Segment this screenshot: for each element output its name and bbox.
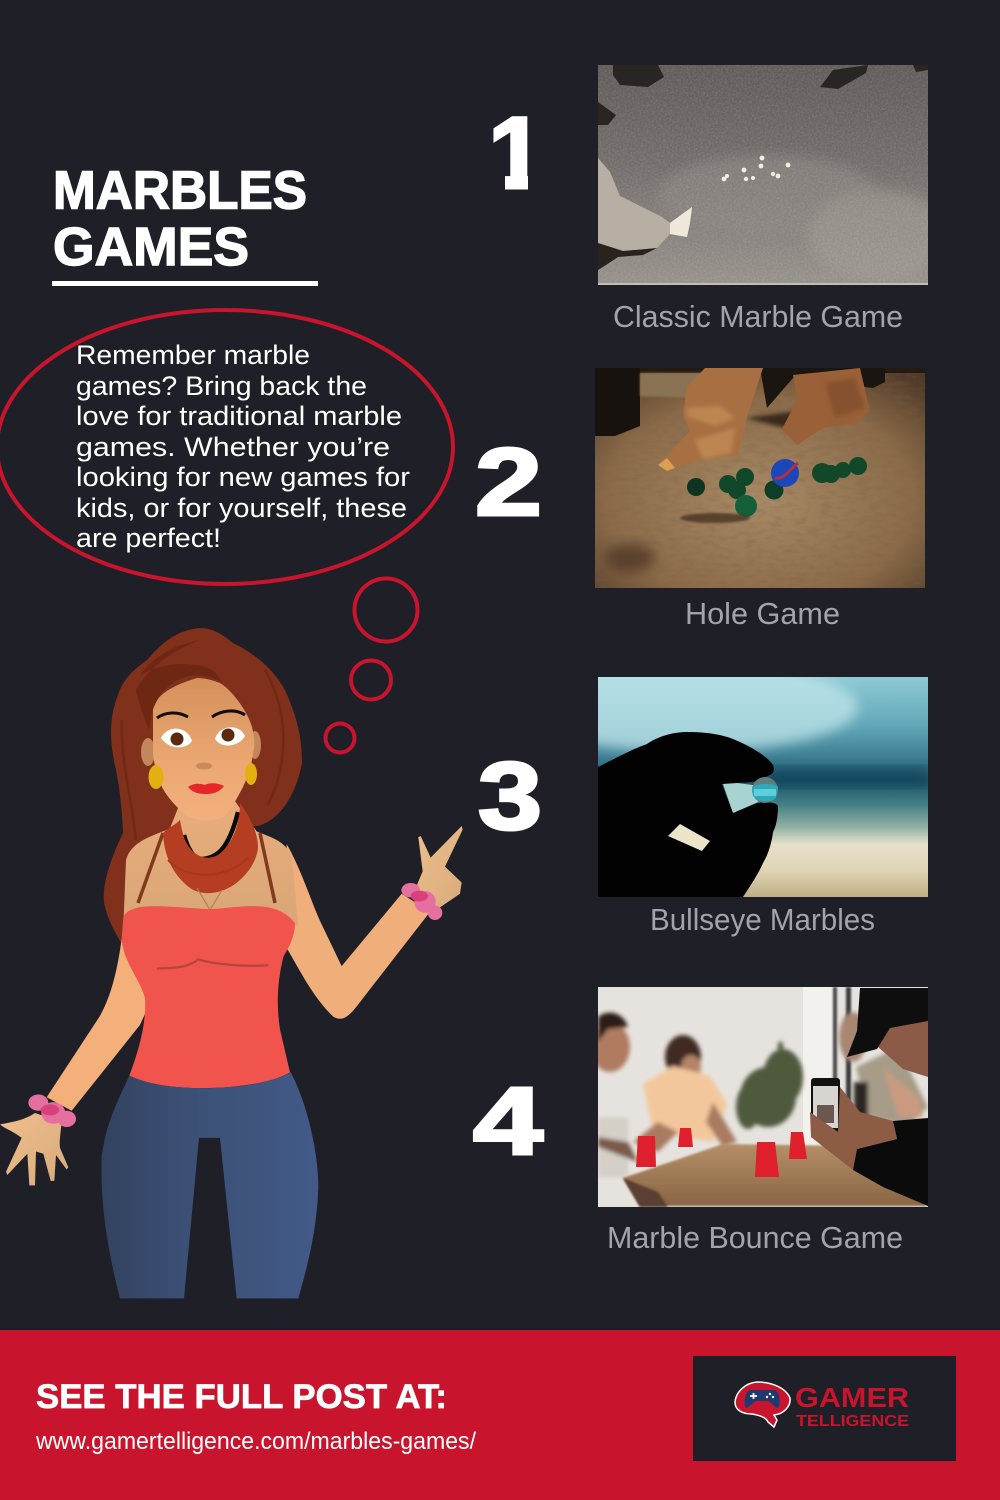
- marble: [752, 777, 778, 803]
- blue marble: [771, 459, 799, 487]
- step 1: [488, 65, 948, 334]
- photo: bullseye marbles: [598, 677, 928, 897]
- step 2: [475, 368, 925, 631]
- title: MARBLES: [53, 160, 307, 220]
- hands and sleeve: [810, 1087, 897, 1170]
- intro paragraph: games? Bring back the: [76, 371, 367, 401]
- illustration: woman pointing: [0, 628, 463, 1298]
- number 2: 2: [475, 429, 542, 536]
- table: [623, 1144, 928, 1206]
- logo box: TELLIGENCE: [796, 1413, 909, 1430]
- footer band: [0, 1330, 1000, 1500]
- necklace: [197, 888, 222, 925]
- jeans: [101, 1072, 318, 1298]
- step 4: [473, 987, 928, 1255]
- lips: [188, 783, 224, 794]
- thought circles: [326, 578, 418, 752]
- straps: [138, 833, 275, 903]
- caption: Classic Marble Game: [613, 299, 903, 334]
- step 3: [478, 662, 928, 937]
- photo: marble bounce game: [598, 987, 928, 1207]
- left scrunchie: [28, 1094, 76, 1127]
- title: GAMES: [53, 217, 249, 277]
- gap between fingers: [722, 781, 768, 813]
- intro paragraph: [76, 340, 410, 553]
- intro paragraph: games. Whether you’re: [76, 432, 390, 462]
- chest and shoulders: [123, 799, 298, 925]
- intro paragraph: love for traditional marble: [76, 401, 402, 431]
- right hand: [413, 826, 463, 912]
- photo: classic marble game: [598, 65, 928, 285]
- intro paragraph: kids, or for yourself, these: [76, 493, 407, 523]
- eyes: [161, 727, 245, 747]
- nose: [196, 762, 212, 770]
- number 3: 3: [478, 743, 542, 850]
- photo: hole game: [595, 368, 925, 588]
- hair back: [104, 628, 302, 945]
- thought bubble with intro text: [0, 310, 453, 752]
- lower body: [0, 826, 463, 1298]
- right arm: [287, 844, 430, 1019]
- top: [122, 906, 295, 1088]
- caption: Marble Bounce Game: [607, 1220, 903, 1255]
- plant: [736, 1042, 803, 1129]
- intro paragraph: Remember marble: [76, 340, 310, 370]
- cups: [636, 1128, 807, 1177]
- caption: Bullseye Marbles: [650, 902, 875, 937]
- body arms and chest: [47, 799, 430, 1111]
- intro paragraph: are perfect!: [76, 523, 221, 553]
- title: [52, 160, 318, 286]
- head: [153, 678, 254, 821]
- url: www.gamertelligence.com/marbles-games/: [35, 1428, 476, 1455]
- eyebrows: [157, 711, 245, 718]
- ears: [141, 731, 261, 766]
- right scrunchie: [401, 883, 442, 920]
- logo box: [693, 1356, 956, 1461]
- brain controller icon: [735, 1382, 790, 1427]
- phone: [811, 1078, 840, 1132]
- intro paragraph: looking for new games for: [76, 462, 410, 492]
- person with cap: [878, 1017, 928, 1077]
- earrings: [148, 763, 257, 789]
- left arm: [47, 939, 148, 1111]
- speech ellipse: [0, 310, 453, 584]
- number 4: 4: [473, 1068, 543, 1175]
- number 1: 1: [488, 96, 545, 210]
- left hand: [0, 1113, 68, 1185]
- hair top overlay: [136, 640, 222, 730]
- scarf: [163, 803, 258, 893]
- caption: Hole Game: [685, 596, 840, 631]
- hair strands: [122, 670, 283, 840]
- call to action: SEE THE FULL POST AT:: [36, 1378, 447, 1416]
- wordmark: GAMER: [795, 1382, 909, 1413]
